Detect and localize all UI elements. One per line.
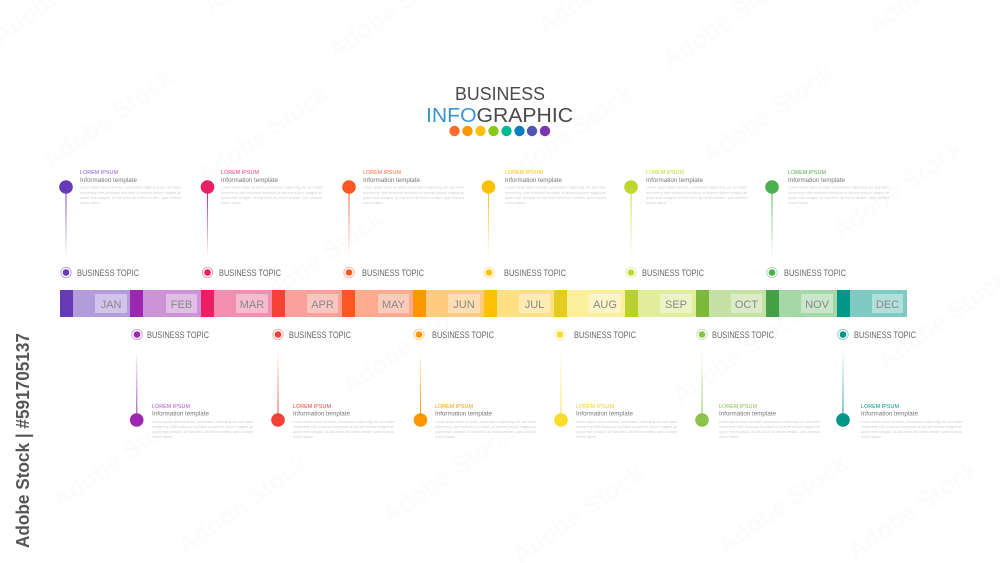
milestone: bottom 4 yellow: Lorem ipsum dolor sit amet, consectetur adipiscing elit, sed diam [576, 420, 677, 424]
milestone: bottom 1 purple [130, 329, 253, 439]
month label: NOV: NOV [805, 299, 830, 311]
milestone: bottom 4 yellow: Information template [576, 410, 633, 418]
milestone: top 1 purple [59, 170, 181, 278]
watermark pattern: Adobe Stock [497, 79, 639, 190]
watermark pattern: Adobe Stock [827, 134, 969, 245]
month label: JUN [448, 294, 480, 313]
milestone: bottom 6 teal: Lorem ipsum dolor sit amet, consectetur adipiscing elit, sed diam [861, 420, 962, 424]
watermark pattern: Adobe Stock [377, 419, 519, 530]
milestone: top 5 lime: quam erat volutpat. Ut wisi enim ad minim veniam, quis nostrud [646, 196, 747, 200]
month label: MAR [236, 294, 268, 313]
month label: MAR: MAR [240, 299, 264, 311]
month label: FEB [166, 294, 197, 313]
milestone: bottom 1 purple: nonummy nibh euismod tincidunt ut laoreet dolore magna ali [152, 425, 253, 429]
milestone: top 2 pink [201, 170, 322, 278]
milestone: bottom 5 light green: exerci tation [719, 435, 739, 439]
milestone: top 1 purple: Information template [80, 177, 137, 184]
milestone: top 3 deep orange: Lorem ipsum dolor sit amet, consectetur adipiscing elit, sed diam [363, 186, 464, 190]
milestone: top 4 amber [482, 170, 606, 278]
title: INFOGRAPHIC [426, 105, 573, 127]
milestone: bottom 4 yellow: quam erat volutpat. Ut wisi enim ad minim veniam, quis nostrud [576, 430, 677, 434]
milestone: bottom 5 light green: BUSINESS TOPIC [712, 330, 774, 340]
milestone: bottom 1 purple: LOREM IPSUM [152, 404, 190, 410]
month label: DEC [872, 294, 903, 313]
milestone: bottom 5 light green [695, 329, 820, 439]
month label: AUG: AUG [593, 299, 617, 311]
month label: AUG [589, 294, 621, 313]
milestone: top 5 lime: Lorem ipsum dolor sit amet, consectetur adipiscing elit, sed diam [646, 186, 747, 190]
month label: APR: APR [311, 299, 334, 311]
milestone: bottom 6 teal [836, 329, 962, 439]
watermark pattern: Adobe Stock [172, 449, 314, 560]
milestone: bottom 5 light green: quam erat volutpat. Ut wisi enim ad minim veniam, quis nostrud [719, 430, 820, 434]
milestone: bottom 2 red: BUSINESS TOPIC [289, 330, 351, 340]
milestone: top 2 pink: exerci tation [221, 201, 241, 205]
milestone: bottom 2 red: quam erat volutpat. Ut wisi enim ad minim veniam, quis nostrud [293, 430, 394, 434]
milestone: bottom 6 teal: nonummy nibh euismod tincidunt ut laoreet dolore magna ali [861, 425, 962, 429]
watermark pattern: Adobe Stock [37, 64, 179, 175]
month label: MAY [378, 294, 409, 313]
milestone: bottom 4 yellow [554, 329, 677, 439]
milestone: top 3 deep orange: BUSINESS TOPIC [362, 268, 424, 278]
milestone: top 5 lime: exerci tation [646, 201, 666, 205]
month label: SEP: SEP [665, 299, 687, 311]
milestone: bottom 1 purple: exerci tation [152, 435, 172, 439]
milestone: top 6 green: exerci tation [788, 201, 808, 205]
milestone: top 2 pink: quam erat volutpat. Ut wisi enim ad minim veniam, quis nostrud [221, 196, 322, 200]
milestone: bottom 3 orange: exerci tation [435, 435, 455, 439]
stock credit: Adobe Stock | #591705137 [13, 333, 33, 548]
milestone: top 1 purple: nonummy nibh euismod tincidunt ut laoreet dolore magna ali [80, 191, 181, 195]
milestone: bottom 6 teal: Information template [861, 410, 918, 418]
milestone: top 4 amber: BUSINESS TOPIC [504, 268, 566, 278]
title [426, 84, 573, 127]
milestone: top 4 amber: Lorem ipsum dolor sit amet, consectetur adipiscing elit, sed diam [505, 186, 606, 190]
month label: FEB: FEB [171, 299, 192, 311]
watermark pattern: Adobe Stock [192, 79, 334, 190]
milestone: bottom 1 purple: Lorem ipsum dolor sit amet, consectetur adipiscing elit, sed diam [152, 420, 253, 424]
month label: JAN [95, 294, 127, 313]
milestone: bottom 3 orange: quam erat volutpat. Ut wisi enim ad minim veniam, quis nostrud [435, 430, 536, 434]
milestone: bottom 3 orange: Lorem ipsum dolor sit amet, consectetur adipiscing elit, sed diam [435, 420, 536, 424]
milestone: bottom 4 yellow: BUSINESS TOPIC [574, 330, 636, 340]
month label: OCT: OCT [735, 299, 758, 311]
milestone: top 4 amber: nonummy nibh euismod tincidunt ut laoreet dolore magna ali [505, 191, 606, 195]
milestone: top 1 purple: exerci tation [80, 201, 100, 205]
milestone: bottom 2 red: LOREM IPSUM [293, 404, 331, 410]
milestone: top 6 green: Information template [788, 177, 845, 184]
milestone: top 6 green [765, 170, 889, 278]
milestone: top 3 deep orange: Information template [363, 177, 420, 184]
milestone: top 4 amber: exerci tation [505, 201, 525, 205]
milestone: top 5 lime [624, 170, 747, 278]
month label: MAY: MAY [382, 299, 406, 311]
milestone: bottom 2 red: Lorem ipsum dolor sit amet, consectetur adipiscing elit, sed diam [293, 420, 394, 424]
milestone: top 3 deep orange [342, 170, 464, 278]
milestone: top 1 purple: BUSINESS TOPIC [77, 268, 139, 278]
milestone: top 2 pink: nonummy nibh euismod tincidunt ut laoreet dolore magna ali [221, 191, 322, 195]
milestone: bottom 1 purple: BUSINESS TOPIC [147, 330, 209, 340]
milestone: bottom 3 orange [414, 329, 536, 439]
milestone: bottom 3 orange: Information template [435, 410, 492, 418]
milestone: bottom 2 red: exerci tation [293, 435, 313, 439]
milestone: bottom 4 yellow: LOREM IPSUM [576, 404, 614, 410]
milestone: bottom 1 purple: quam erat volutpat. Ut wisi enim ad minim veniam, quis nostrud [152, 430, 253, 434]
watermark pattern: Adobe Stock [712, 449, 854, 560]
milestone: bottom 6 teal: LOREM IPSUM [861, 404, 899, 410]
milestone: top 3 deep orange: LOREM IPSUM [363, 170, 401, 176]
watermark pattern: Adobe Stock [697, 59, 839, 170]
watermark pattern: Adobe Stock [47, 404, 189, 515]
milestone: bottom 5 light green: Information template [719, 410, 776, 418]
watermark pattern: Adobe Stock [337, 289, 479, 400]
month label: JUL [519, 294, 550, 313]
watermark pattern: Adobe Stock [247, 204, 389, 315]
milestone: top 3 deep orange: quam erat volutpat. Ut wisi enim ad minim veniam, quis nostrud [363, 196, 464, 200]
title: BUSINESS [455, 84, 545, 104]
milestone: top 2 pink: LOREM IPSUM [221, 170, 259, 176]
milestone: top 6 green: LOREM IPSUM [788, 170, 826, 176]
title colour dots [449, 126, 550, 136]
milestone: top 4 amber: Information template [505, 177, 562, 184]
month label: NOV [801, 294, 833, 313]
milestone: top 5 lime: Information template [646, 177, 703, 184]
milestone: bottom 2 red [271, 329, 394, 439]
month label: JAN: JAN [101, 299, 121, 311]
milestone: bottom 3 orange: LOREM IPSUM [435, 404, 473, 410]
milestone: bottom 4 yellow: exerci tation [576, 435, 596, 439]
milestone: top 1 purple: LOREM IPSUM [80, 170, 118, 176]
month label: SEP [660, 294, 692, 313]
watermark pattern: Adobe Stock [842, 454, 984, 563]
milestone: top 5 lime: BUSINESS TOPIC [642, 268, 704, 278]
milestone: bottom 4 yellow: nonummy nibh euismod tincidunt ut laoreet dolore magna ali [576, 425, 677, 429]
milestone: top 3 deep orange: nonummy nibh euismod tincidunt ut laoreet dolore magna ali [363, 191, 464, 195]
milestone: top 1 purple: Lorem ipsum dolor sit amet, consectetur adipiscing elit, sed diam [80, 186, 181, 190]
milestone: top 6 green: Lorem ipsum dolor sit amet, consectetur adipiscing elit, sed diam [788, 186, 889, 190]
milestone: top 5 lime: LOREM IPSUM [646, 170, 684, 176]
milestone: top 6 green: quam erat volutpat. Ut wisi enim ad minim veniam, quis nostrud [788, 196, 889, 200]
milestone: bottom 2 red: nonummy nibh euismod tincidunt ut laoreet dolore magna ali [293, 425, 394, 429]
milestone: bottom 5 light green: LOREM IPSUM [719, 404, 757, 410]
milestone: top 5 lime: nonummy nibh euismod tincidunt ut laoreet dolore magna ali [646, 191, 747, 195]
milestone: bottom 6 teal: BUSINESS TOPIC [854, 330, 916, 340]
milestone: top 2 pink: BUSINESS TOPIC [219, 268, 281, 278]
milestone: bottom 5 light green: nonummy nibh euismod tincidunt ut laoreet dolore magna ali [719, 425, 820, 429]
milestone: bottom 5 light green: Lorem ipsum dolor sit amet, consectetur adipiscing elit, sed diam [719, 420, 820, 424]
month label: JUN: JUN [453, 299, 475, 311]
milestone: top 4 amber: quam erat volutpat. Ut wisi enim ad minim veniam, quis nostrud [505, 196, 606, 200]
milestone: top 4 amber: LOREM IPSUM [505, 170, 543, 176]
month label: DEC: DEC [876, 299, 899, 311]
milestone: bottom 1 purple: Information template [152, 410, 209, 418]
milestone: bottom 6 teal: exerci tation [861, 435, 881, 439]
milestone: top 6 green: BUSINESS TOPIC [784, 268, 846, 278]
month timeline bar [60, 290, 907, 317]
watermark pattern: Adobe Stock [667, 299, 809, 410]
milestone: top 6 green: nonummy nibh euismod tincidunt ut laoreet dolore magna ali [788, 191, 889, 195]
milestone: bottom 3 orange: BUSINESS TOPIC [432, 330, 494, 340]
milestone: top 3 deep orange: exerci tation [363, 201, 383, 205]
milestone: bottom 2 red: Information template [293, 410, 350, 418]
milestone: bottom 6 teal: quam erat volutpat. Ut wisi enim ad minim veniam, quis nostrud [861, 430, 962, 434]
month label: APR [307, 294, 338, 313]
month label: JUL: JUL [525, 299, 544, 311]
milestone: bottom 3 orange: nonummy nibh euismod tincidunt ut laoreet dolore magna ali [435, 425, 536, 429]
milestone: top 1 purple: quam erat volutpat. Ut wisi enim ad minim veniam, quis nostrud [80, 196, 181, 200]
milestone: top 2 pink: Lorem ipsum dolor sit amet, consectetur adipiscing elit, sed diam [221, 186, 322, 190]
month label: OCT [731, 294, 762, 313]
milestone: top 2 pink: Information template [221, 177, 278, 184]
